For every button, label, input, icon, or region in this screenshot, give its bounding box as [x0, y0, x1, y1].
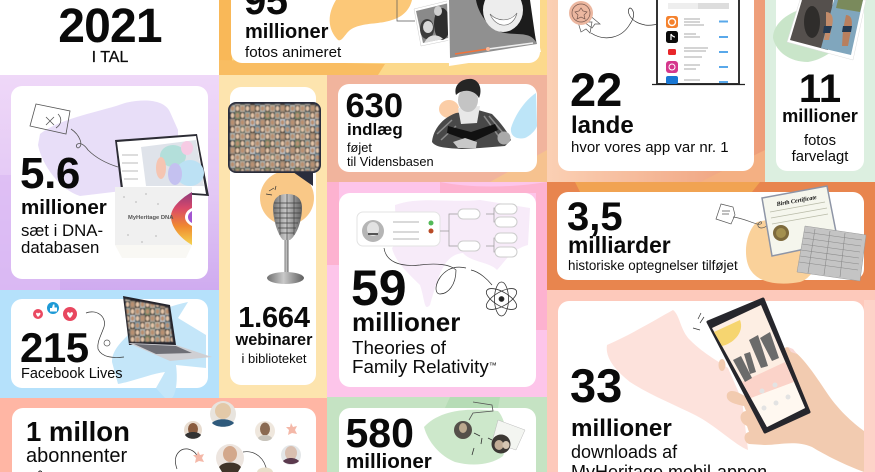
illustration: DNA kit box: [115, 187, 192, 258]
icon: orange circle: [260, 171, 314, 225]
number: 5.6: 5.6: [20, 149, 80, 198]
number: 215: 215: [20, 324, 89, 371]
number: 11: 11: [799, 67, 841, 111]
number: 630: 630: [346, 87, 403, 125]
illustration: photos: [397, 0, 541, 66]
certificate title: Birth Certificate: [775, 195, 818, 208]
speech bubble: webinar faces: [228, 102, 321, 186]
watercolor blob: pink: [607, 310, 748, 450]
panel: indlæg: [327, 75, 547, 182]
caption: Theories of Family Relativity: ™: [489, 361, 497, 370]
panel: fotos farvelagt: [765, 0, 875, 182]
phone: app ranking: [652, 0, 745, 84]
illustration: tablet: [115, 134, 209, 196]
watercolor blob: orange: [746, 215, 818, 284]
illustration: record matches: [454, 402, 525, 455]
caption: fotos animeret: fotos animeret: [245, 44, 342, 61]
icon: document: [716, 204, 768, 228]
icon: dna sample: [30, 104, 118, 167]
watercolor blob: orange: [330, 0, 412, 40]
caption: i biblioteket: i biblioteket: [241, 351, 307, 366]
label: millioner: millioner: [571, 415, 672, 442]
label: milliarder: milliarder: [568, 232, 671, 258]
panel: historiske optegnelser: [547, 182, 875, 290]
number: 33: 33: [570, 359, 622, 412]
phone screen: [712, 305, 805, 427]
world map: [392, 200, 530, 307]
panel: Facebook Lives: [0, 290, 219, 398]
illustration: colorized photos: [787, 0, 866, 60]
label: millioner: millioner: [352, 307, 460, 337]
panel: DNA-databasen: [0, 75, 219, 290]
person card: [357, 212, 440, 246]
caption: fotos farvelagt: farvelagt: [792, 149, 848, 165]
label: lande: lande: [571, 112, 634, 139]
icon: medal: [569, 1, 600, 33]
watercolor blob: green: [424, 410, 506, 464]
logo text: MyHeritage DNA: [128, 215, 174, 221]
phone body: [708, 299, 809, 432]
caption: føjet til Vidensbasen: til Vidensbasen: [347, 154, 434, 169]
panel: 580 millioner: [327, 397, 547, 472]
caption: historiske optegnelser tilføjet: historiske optegnelser tilføjet: [568, 258, 738, 273]
connector line: [86, 312, 124, 357]
caption: downloads af MyHeritage mobil-appen: downloads af: [571, 442, 678, 462]
watercolor blob: blue: [112, 302, 206, 398]
number: 22: 22: [570, 63, 622, 116]
number: 580: 580: [346, 410, 414, 456]
watercolor blob: blue: [511, 93, 537, 138]
icon: atom: [483, 282, 520, 316]
panel: mobil-appen: [547, 290, 875, 472]
caption: Theories of Family Relativity: Family Relativity: [352, 356, 489, 377]
watercolor blob: orange: [439, 100, 459, 118]
connector line: [384, 248, 492, 294]
caption: Theories of Family Relativity: Theories of: [352, 337, 447, 358]
number: 1 millon: 1 millon: [26, 416, 130, 447]
icon: reactions: [33, 302, 77, 321]
subheading: I TAL: I TAL: [92, 49, 128, 66]
number: 3,5: 3,5: [567, 195, 623, 239]
label: millioner: millioner: [782, 106, 858, 126]
panel: webinarer: [219, 75, 327, 398]
watercolor blob: purple: [38, 100, 178, 196]
family tree diagram: [440, 204, 517, 257]
finger nails: [788, 347, 797, 354]
number: 1.664: 1.664: [238, 302, 310, 334]
sparkle lines: [693, 313, 704, 330]
illustration: boy reading: [432, 79, 511, 149]
icon: microphone: [266, 186, 304, 284]
caption: Facebook Lives: Facebook Lives: [21, 366, 123, 382]
panel: 22 lande: [547, 0, 765, 182]
caption: føjet til Vidensbasen: føjet: [347, 140, 372, 155]
label: millioner: millioner: [245, 21, 329, 43]
label: indlæg: indlæg: [347, 120, 403, 139]
label: millioner: millioner: [21, 196, 107, 219]
thumb tip: [718, 359, 726, 371]
label: webinarer: webinarer: [235, 331, 313, 349]
heading: 2021: 2021: [58, 0, 162, 53]
caption: sæt i DNA-databasen: sæt i DNA-: [21, 221, 103, 240]
document: census table: [797, 226, 866, 281]
certificate: Birth Certificate: [762, 186, 838, 256]
label: abonnenter: abonnenter: [26, 445, 128, 467]
panel: abonnenter: [0, 398, 327, 472]
panel: Theories of Family Relativity: [327, 182, 547, 397]
illustration: subscribers: [175, 401, 301, 472]
hand: [727, 347, 864, 472]
illustration: hand holding phone: [693, 299, 864, 472]
caption: sæt i DNA-databasen: databasen: [21, 238, 99, 257]
caption: fotos farvelagt: fotos: [804, 133, 836, 149]
caption: hvor vores app var nr. 1: hvor vores app var nr. 1: [571, 139, 729, 156]
watercolor blob: green: [773, 10, 840, 62]
number: 59: 59: [351, 260, 407, 316]
illustration: laptop: [123, 296, 212, 361]
panel: 2021 i tal: [0, 0, 219, 75]
panel: fotos animeret: [219, 0, 547, 75]
connector line: [591, 8, 665, 38]
